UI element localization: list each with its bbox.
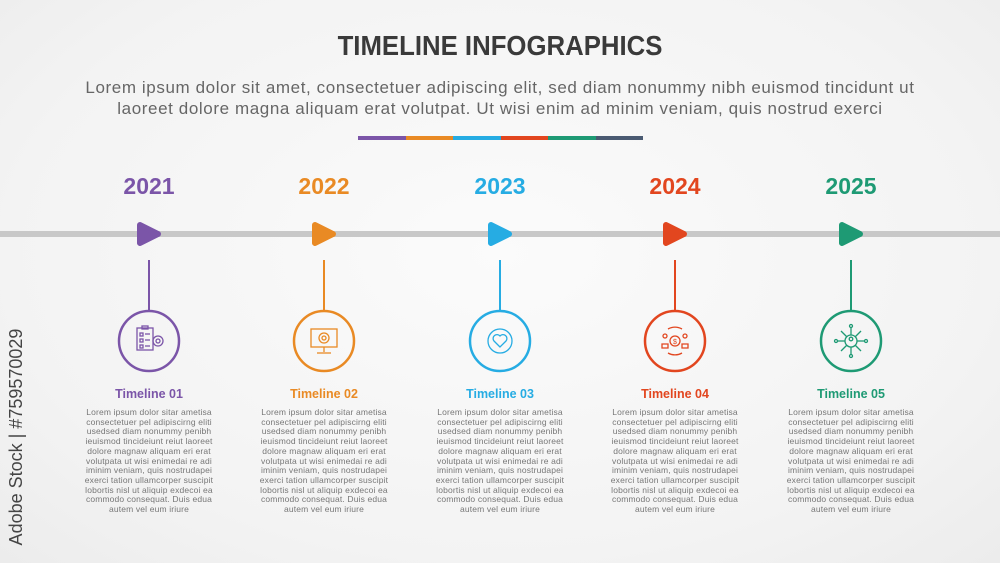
body text 3: usedsed diam nonummy penibh	[438, 426, 562, 436]
body text 2: Lorem ipsum dolor sitar ametisa	[261, 407, 387, 417]
body text 1: autem vel eum iriure	[109, 504, 189, 514]
icon: monitor gear	[311, 329, 337, 353]
year 2024: 2024	[649, 173, 701, 199]
body text 2: usedsed diam nonummy penibh	[262, 426, 386, 436]
body text 5: volutpata ut wisi enimedai re adi	[788, 456, 914, 466]
subtitle text: Lorem ipsum dolor sit amet, consectetuer adipiscing elit, sed diam nonummy nibh euismod tincidunt ut	[85, 78, 915, 97]
body text 5: ieuismod tincideiunt reiut laoreet	[787, 436, 914, 446]
column 2	[260, 173, 388, 514]
body text 5	[787, 407, 915, 514]
body text 2: exerci tation ullamcorper suscipit	[260, 475, 388, 485]
title: TIMELINE INFOGRAPHICS	[338, 30, 662, 61]
year 2021: 2021	[123, 173, 175, 199]
marker 1	[119, 225, 179, 371]
year 2025: 2025	[825, 173, 877, 199]
body text 2: commodo consequat. Duis edua	[261, 494, 387, 504]
body text 2: volutpata ut wisi enimedai re adi	[261, 456, 387, 466]
body text 4: consectetuer pel adipiscirng eliti	[612, 417, 738, 427]
body text 4	[611, 407, 739, 514]
body text 2	[260, 407, 388, 514]
body text 2: autem vel eum iriure	[284, 504, 364, 514]
body text 1: dolore magnaw aliquam eri erat	[87, 446, 211, 456]
heading timeline 03: Timeline 03	[466, 387, 534, 401]
body text 5: dolore magnaw aliquam eri erat	[789, 446, 913, 456]
column 3	[436, 173, 564, 514]
body text 1: ieuismod tincideiunt reiut laoreet	[85, 436, 212, 446]
subtitle text: laoreet dolore magna aliquam erat volutpat. Ut wisi enim ad minim veniam, quis nostrud exerci	[117, 99, 883, 118]
icon: checklist gear	[137, 326, 163, 350]
body text 4: exerci tation ullamcorper suscipit	[611, 475, 739, 485]
timeline axis	[0, 231, 1000, 237]
icon: money exchange: $	[673, 339, 677, 346]
body text 1: volutpata ut wisi enimedai re adi	[86, 456, 212, 466]
column 5	[787, 173, 915, 514]
heading timeline 02: Timeline 02	[290, 387, 358, 401]
body text 4: Lorem ipsum dolor sitar ametisa	[612, 407, 738, 417]
body text 3: autem vel eum iriure	[460, 504, 540, 514]
body text 4: dolore magnaw aliquam eri erat	[613, 446, 737, 456]
body text 3: Lorem ipsum dolor sitar ametisa	[437, 407, 563, 417]
body text 3: iminim veniam, quis nostrudapei	[437, 465, 563, 475]
year 2022: 2022	[298, 173, 350, 199]
subtitle text	[85, 78, 915, 118]
body text 5: Lorem ipsum dolor sitar ametisa	[788, 407, 914, 417]
column 1	[85, 173, 213, 514]
body text 5: autem vel eum iriure	[811, 504, 891, 514]
body text 1: consectetuer pel adipiscirng eliti	[86, 417, 212, 427]
icon: network person	[834, 324, 868, 358]
body text 3: consectetuer pel adipiscirng eliti	[437, 417, 563, 427]
body text 5: exerci tation ullamcorper suscipit	[787, 475, 915, 485]
body text 3: dolore magnaw aliquam eri erat	[438, 446, 562, 456]
body text 1	[85, 407, 213, 514]
icon: money exchange	[662, 327, 688, 355]
watermark: Adobe Stock | #759570029	[6, 329, 26, 545]
body text 4: lobortis nisl ut aliquip exdecoi ea	[611, 485, 739, 495]
marker 4	[645, 225, 705, 371]
heading timeline 01: Timeline 01	[115, 387, 183, 401]
body text 5: iminim veniam, quis nostrudapei	[788, 465, 914, 475]
body text 4: autem vel eum iriure	[635, 504, 715, 514]
body text 5: consectetuer pel adipiscirng eliti	[788, 417, 914, 427]
body text 1: exerci tation ullamcorper suscipit	[85, 475, 213, 485]
body text 2: consectetuer pel adipiscirng eliti	[261, 417, 387, 427]
body text 4: volutpata ut wisi enimedai re adi	[612, 456, 738, 466]
year 2023: 2023	[474, 173, 526, 199]
body text 5: lobortis nisl ut aliquip exdecoi ea	[787, 485, 915, 495]
color bar divider	[358, 136, 643, 140]
marker 2	[294, 225, 354, 371]
icon: heart	[488, 329, 512, 353]
body text 2: ieuismod tincideiunt reiut laoreet	[260, 436, 388, 446]
heading timeline 05: Timeline 05	[817, 387, 885, 401]
body text 3: ieuismod tincideiunt reiut laoreet	[436, 436, 564, 446]
body text 1: usedsed diam nonummy penibh	[87, 426, 211, 436]
body text 5: usedsed diam nonummy penibh	[789, 426, 913, 436]
body text 2: dolore magnaw aliquam eri erat	[262, 446, 386, 456]
body text 3: commodo consequat. Duis edua	[437, 494, 563, 504]
column 4	[611, 173, 739, 514]
body text 3	[436, 407, 564, 514]
body text 4: iminim veniam, quis nostrudapei	[612, 465, 738, 475]
body text 4: commodo consequat. Duis edua	[612, 494, 738, 504]
body text 1: Lorem ipsum dolor sitar ametisa	[86, 407, 212, 417]
body text 4: usedsed diam nonummy penibh	[613, 426, 737, 436]
body text 1: commodo consequat. Duis edua	[86, 494, 212, 504]
body text 3: lobortis nisl ut aliquip exdecoi ea	[436, 485, 564, 495]
marker 3	[470, 225, 530, 371]
body text 2: iminim veniam, quis nostrudapei	[261, 465, 387, 475]
marker 5	[821, 225, 881, 371]
heading timeline 04: Timeline 04	[641, 387, 709, 401]
body text 4: ieuismod tincideiunt reiut laoreet	[611, 436, 738, 446]
body text 5: commodo consequat. Duis edua	[788, 494, 914, 504]
body text 3: volutpata ut wisi enimedai re adi	[437, 456, 563, 466]
body text 1: iminim veniam, quis nostrudapei	[86, 465, 212, 475]
body text 1: lobortis nisl ut aliquip exdecoi ea	[85, 485, 213, 495]
body text 3: exerci tation ullamcorper suscipit	[436, 475, 564, 485]
body text 2: lobortis nisl ut aliquip exdecoi ea	[260, 485, 388, 495]
